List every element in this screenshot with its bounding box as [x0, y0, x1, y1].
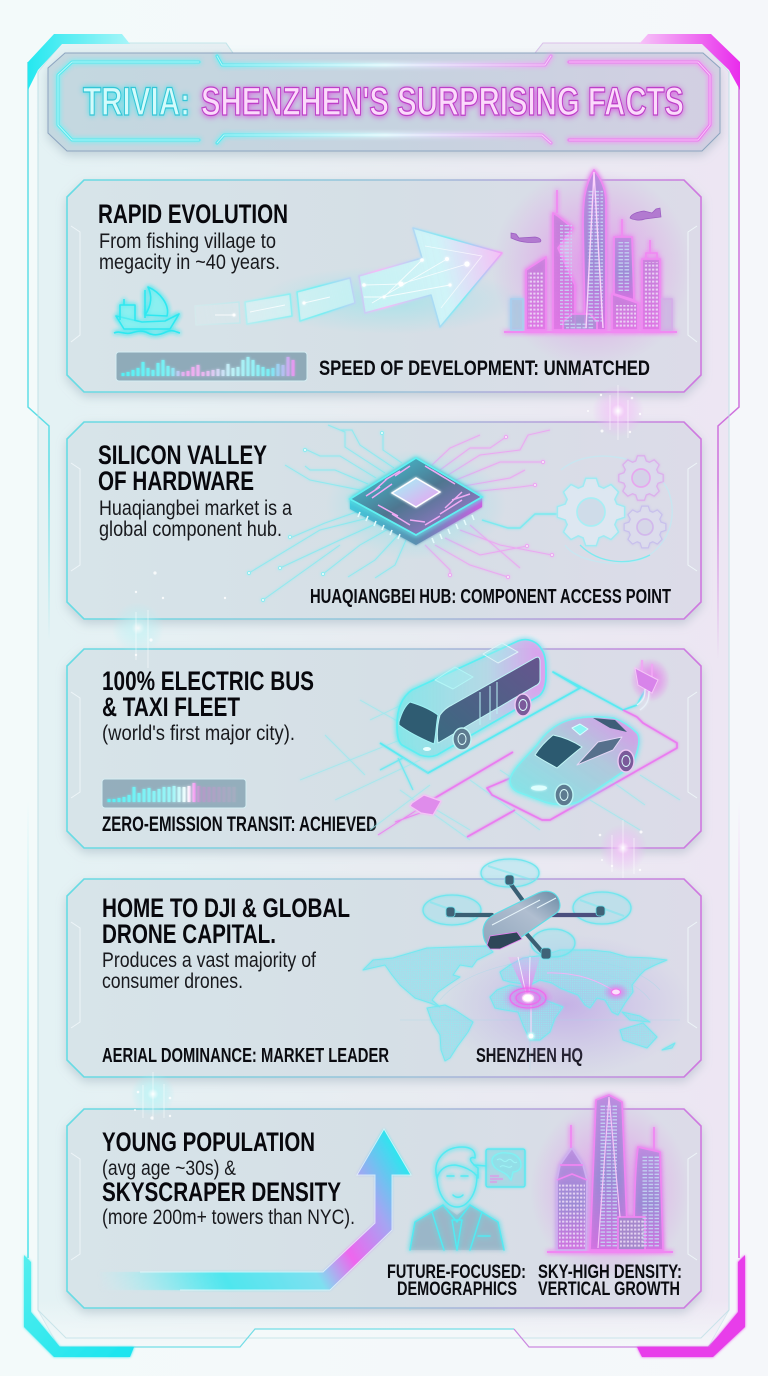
- illustration: world map: [363, 933, 690, 1077]
- heading: [102, 666, 314, 722]
- sparkles: [112, 385, 647, 1120]
- arrow: rising growth: [100, 1129, 411, 1290]
- caption: SPEED OF DEVELOPMENT: UNMATCHED: [319, 357, 650, 380]
- panel: silicon valley of hardware: [67, 422, 701, 619]
- chart: speed bars: [116, 352, 307, 381]
- icon: fishing boat: [114, 287, 180, 335]
- heading: [98, 440, 267, 496]
- marker: shenzhen hq: [502, 983, 629, 1039]
- panel: drone capital: [67, 859, 701, 1077]
- heading: OF HARDWARE: [98, 466, 254, 496]
- heading: 100% ELECTRIC BUS: [102, 666, 314, 696]
- icon: drone: [423, 859, 631, 959]
- text block: SKYSCRAPER DENSITY: [102, 1177, 341, 1207]
- description: [99, 496, 292, 541]
- description: [102, 948, 316, 993]
- icon: brain panel: [486, 1149, 525, 1187]
- card background: [67, 1109, 701, 1308]
- chart: emission bars: [102, 779, 246, 808]
- text block: (more 200m+ towers than NYC).: [102, 1205, 355, 1229]
- heading: & TAXI FLEET: [102, 692, 240, 722]
- captions: [387, 1262, 682, 1300]
- captions: DEMOGRAPHICS: [397, 1279, 517, 1300]
- captions: FUTURE-FOCUSED:: [387, 1262, 526, 1283]
- icon: charging plug bottom: [410, 795, 441, 815]
- heading: RAPID EVOLUTION: [98, 199, 288, 229]
- icon: skyscrapers: [530, 1095, 690, 1280]
- description: global component hub.: [99, 517, 282, 541]
- icon: young professional: [410, 1147, 504, 1250]
- charging circuit lines: [300, 672, 680, 840]
- arrow: growth: [195, 228, 520, 334]
- description: consumer drones.: [102, 969, 243, 993]
- captions: VERTICAL GROWTH: [538, 1279, 680, 1300]
- icon: charging plug top: [630, 658, 670, 710]
- description: Huaqiangbei market is a: [99, 496, 292, 520]
- text block: YOUNG POPULATION: [102, 1127, 315, 1157]
- card background: [67, 649, 701, 848]
- description: (world's first major city).: [102, 721, 295, 745]
- caption: ZERO-EMISSION TRANSIT: ACHIEVED: [102, 813, 377, 836]
- text block: (avg age ~30s) &: [102, 1156, 236, 1180]
- icon: gears: [557, 456, 672, 563]
- card background: [67, 180, 701, 392]
- icon: electric taxi: [510, 717, 639, 806]
- description: From fishing village to: [99, 229, 276, 253]
- description: [99, 229, 280, 274]
- illustration: skyline: [492, 168, 692, 368]
- heading: HOME TO DJI & GLOBAL: [102, 893, 350, 923]
- text block: [102, 1127, 355, 1229]
- captions: SKY-HIGH DENSITY:: [538, 1262, 682, 1283]
- neon title border: [58, 56, 710, 143]
- card background: [67, 422, 701, 619]
- title panel: [48, 53, 720, 151]
- captions: SHENZHEN HQ: [476, 1045, 583, 1067]
- panel: young population and skyscraper density: [67, 1095, 701, 1308]
- card background: [67, 879, 701, 1077]
- heading: [102, 893, 350, 949]
- panel: electric fleet: [67, 640, 701, 848]
- circuit traces: [247, 425, 558, 602]
- icon: microchip: [326, 450, 506, 560]
- icon: electric bus: [397, 640, 546, 756]
- heading: SILICON VALLEY: [98, 440, 267, 470]
- title text: TRIVIA:: [83, 80, 190, 124]
- icon: planes: [511, 208, 661, 243]
- captions: AERIAL DOMINANCE: MARKET LEADER: [102, 1045, 389, 1067]
- panel: rapid evolution: [67, 168, 701, 392]
- heading: DRONE CAPITAL.: [102, 919, 276, 949]
- title banner: [48, 53, 720, 151]
- description: Produces a vast majority of: [102, 948, 316, 972]
- description: megacity in ~40 years.: [99, 250, 280, 274]
